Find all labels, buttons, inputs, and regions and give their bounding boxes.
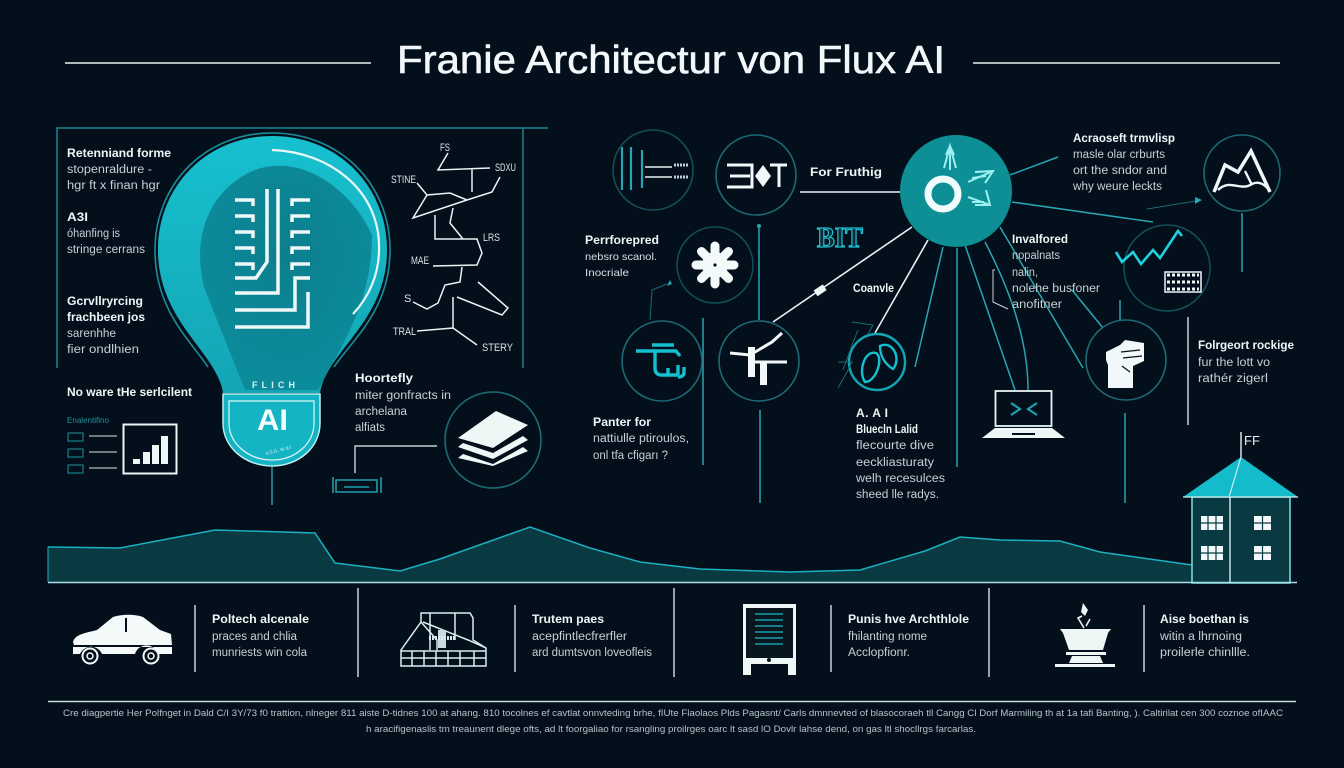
network lines [650,157,1242,503]
hills chart [48,527,1192,582]
text block: Poltech alcenaie: Poltech alcenale [212,612,309,626]
text block: A. AI: welh recesulces [855,473,945,485]
text block: Trutem paes: acepfintlecfrerfler [532,631,627,643]
circuit diagram: STERY [482,342,514,354]
icon circle: lines [613,130,693,210]
text block: Panter for [593,415,689,462]
text block: A3I: stringe cerrans [67,244,145,256]
bulb glass [158,136,387,393]
text block: Folrgeort rockige: rathér zigerl [1198,373,1268,385]
text block: Invalfored [1012,232,1100,311]
hub circle [900,135,1012,247]
text block: A. AI: Bluecln Lalid [856,422,918,436]
bulb label: FLICH [252,380,295,390]
icon circle: S diamond T [716,135,796,215]
label: Coanvle: Coanvle [853,281,894,295]
text block: Hoortefly: alfiats [355,422,385,434]
circuit diagram: LRS [483,232,500,244]
footer text [63,708,1284,734]
text block: Trutem paes: ard dumtsvon loveofleis [532,647,652,659]
bulb highlight [272,150,379,314]
icon circle: teal blob [838,322,905,390]
text block: A3I: óhanfing is [67,228,120,240]
icon circle: teal glyph [622,321,702,401]
text block: A3I: A3I [67,210,88,224]
text block: Punis hve Archthlole [848,612,969,659]
icon: laptop [982,391,1065,438]
icon: stacked layers [445,392,541,488]
text block: Hoortefly: miter gonfracts in [355,390,451,402]
text block: Poltech alcenaie: munriests win cola [212,647,308,659]
text block: Aise boethan is: Aise boethan is [1160,612,1249,626]
text block: Trutem paes [532,612,652,659]
icon: building plan [401,613,486,666]
icon: tablet stand [743,604,796,675]
text block: A. AI: A. A I [856,406,888,420]
text block: Acraoseft trmvlisp [1072,131,1175,193]
text block: Retenniand forme: hgr ft x finan hgr [67,180,160,192]
icon circle: gear [677,227,753,303]
text block: Acraoseft trmvlisp: Acraoseft trmvlisp [1073,131,1175,145]
text block: Perrforepred [585,233,659,279]
bulb outline [155,133,390,367]
circuit diagram: FS [440,142,450,154]
text block: A. AI [855,406,945,501]
text block: Panter for: onl tfa cfigarı ? [593,450,668,462]
footer text: h aracifigenaslis tm treaunent dlege ofts, ad lt foorgaliao for rsangling proilrges oarc lt sasd lO Dovlr lahse dend, on gas ltl shocllrgs farcarlas. [366,724,976,734]
text block: A. AI: sheed lle radys. [856,489,939,501]
text block: Panter for: nattiulle ptiroulos, [593,433,689,445]
icon: car [73,615,172,664]
text block: Folrgeort rockige: fur the lott vo [1198,357,1270,369]
base label: AI [257,404,288,437]
panel: left frame [57,128,548,368]
BIT label: BIT [817,222,863,254]
text block: Punis hve Archthlole: Punis hve Archthlole [848,612,969,626]
chart icon [67,416,176,474]
text block: Hoortefly: archelana [355,406,408,418]
text block: Aise boethan is: proilerle chinllle. [1160,647,1250,659]
text block: A. AI: flecourte dive [856,440,934,452]
text block: Folrgeort rockige [1198,338,1294,385]
text block: Hoortefly: Hoortefly [355,371,413,385]
circuit diagram: MAE [411,255,429,267]
bulb inner shade [200,166,372,390]
text block: Scrvllryrcing [67,294,145,356]
footer text: Cre diagpertie Her Polfnget in Dald C/I 3Y/73 f0 trattion, nlneger 811 aiste D-tidnes 100 at ahang. 810 tocolnes ef cavtlat onnvteding brhe, fIUte Flaolaos Plds Pagasnt/ Carls dmnnevted of blasocoraeh tll Cangg Cl Dorf Marmiling th at 1a tafi Banting, ). Caltirilat cen 300 coznoe ofIAAC [63,708,1284,718]
icon: light bulb [155,133,390,505]
text block: Invalfored: nalin, [1012,267,1038,279]
icon circle: mountain ribbon [1204,135,1280,211]
baseline [48,582,1297,584]
icon: house [1183,432,1298,583]
text block: Acraoseft trmvlisp: why weure leckts [1072,181,1162,193]
text block: Scrvllryrcing: frachbeen jos [67,310,145,324]
icon: house: FF [1244,433,1260,448]
text block: Invalfored: nolehe busfoner [1012,283,1100,295]
text block: A3I [67,210,145,256]
text block: Invalfored: nopalnats [1012,250,1060,262]
circuit diagram: STINE [391,174,416,186]
text block: Acraoseft trmvlisp: ort the sndor and [1073,165,1167,177]
text block: Punis hve Archthlole: Acclopfionr. [848,647,910,659]
icon: printer connector [333,446,437,493]
footer rule [48,700,1296,702]
text block: Aise boethan is [1159,612,1250,659]
text block: Retenniand forme [67,146,171,192]
icon circle: hand [1086,320,1166,400]
chart icon: Enalentifino [67,416,110,425]
icon: bowl with steam [1055,603,1115,667]
bottom strip dividers [195,588,1144,677]
text block: Poltech alcenaie [212,612,309,659]
text block: Folrgeort rockige: Folrgeort rockige [1198,338,1294,352]
text block: Invalfored: anofitner [1012,299,1062,311]
text block: No ware: No ware tHe serlcilent [67,385,192,399]
text block: Invalfored: Invalfored [1012,232,1068,246]
icon: light bulb: uso.wai [265,445,292,457]
icon circle: white tool [719,321,799,401]
text block: Perrforepred: nebsro scanol. [585,251,657,263]
text block: Perrforepred: Perrforepred [585,233,659,247]
title: Franie Architectur von Flux AI [397,39,945,82]
text block: Scrvllryrcing: sarenhhe [67,328,116,340]
text block: Scrvllryrcing: Gcrvllryrcing [67,294,143,308]
label: For Fruthig: For Fruthig [810,165,882,179]
icon circle: trend chart [1116,225,1210,311]
text block: Punis hve Archthlole: fhilanting nome [848,631,927,643]
text block: Scrvllryrcing: fier ondlhien [67,344,139,356]
text block: Retenniand forme: Retenniand forme [67,146,171,160]
text block: Perrforepred: Inocriale [585,267,629,279]
circuit diagram: S [404,293,411,305]
circuit diagram [391,142,516,354]
text block: Trutem paes: Trutem paes [532,612,604,626]
text block: Retenniand forme: stopenraldure - [67,164,152,176]
circuit diagram: TRAL [393,326,416,338]
text block: Panter for: Panter for [593,415,651,429]
text block: Aise boethan is: witin a lhrnoing [1159,631,1242,643]
text block: Acraoseft trmvlisp: masle olar crburts [1073,149,1165,161]
text block: Poltech alcenaie: praces and chlia [212,631,298,643]
text block: A. AI: eeckliasturaty [856,457,934,469]
chip icon [235,189,310,327]
circuit diagram: SDXU [495,162,516,174]
bulb base [223,394,320,466]
text block: Hoortefly [355,371,451,434]
